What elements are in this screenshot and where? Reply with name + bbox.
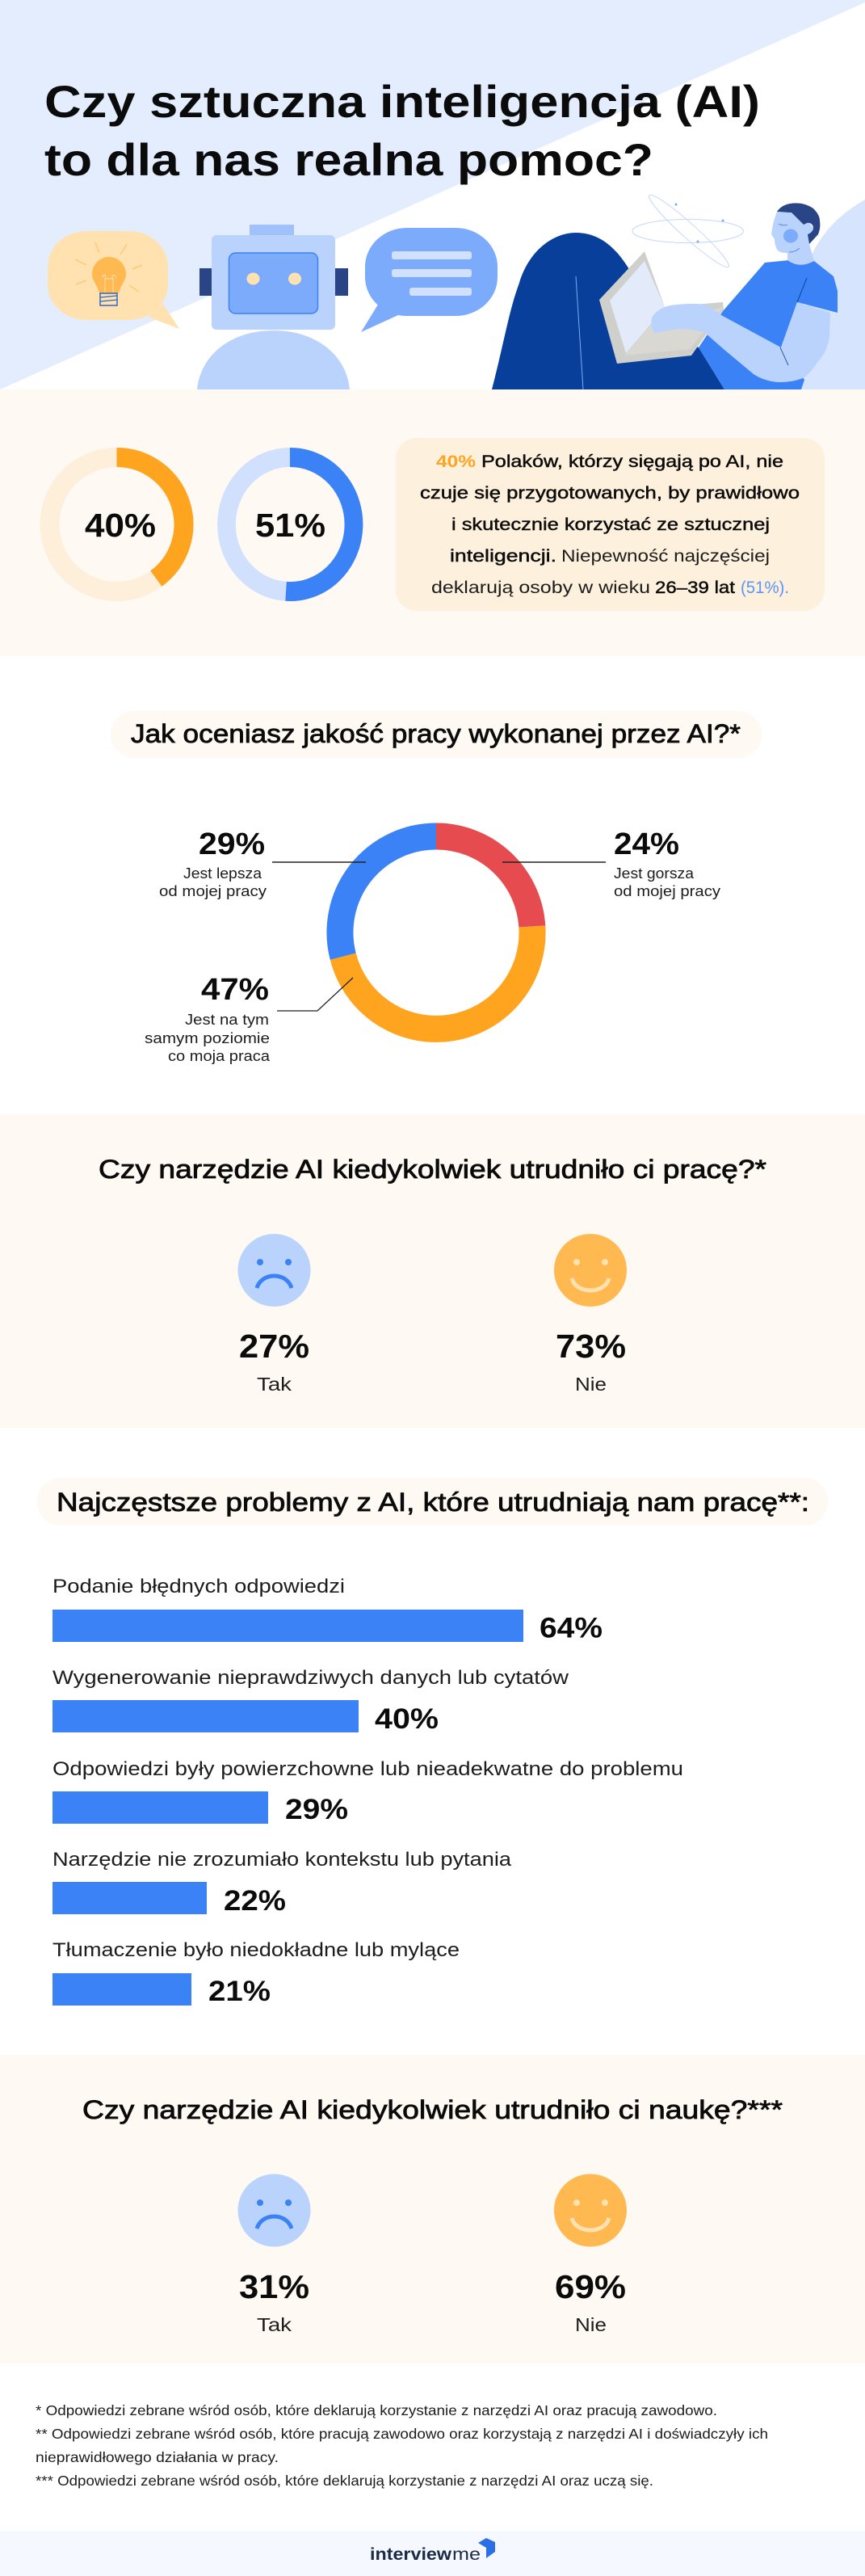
- bar: false data 40%: [52, 1667, 569, 1735]
- chart: quality donut: [340, 836, 532, 1029]
- bar: inaccurate translation 21%: 21%: [208, 1976, 271, 2007]
- bar: incorrect answers 64%: [52, 1576, 603, 1644]
- callout: preparedness text: czuje się przygotowanych, by prawidłowo: [420, 484, 800, 503]
- stat: 69% no: 69%: [555, 2268, 626, 2305]
- chart: 40% donut: [50, 457, 184, 591]
- icon: happy face: [554, 1234, 627, 1307]
- stat: 31% yes: 31%: [239, 2268, 309, 2305]
- bar: misunderstood context 22%: [52, 1849, 512, 1917]
- icon: lightbulb speech bubble: [48, 231, 179, 329]
- footer band: [0, 2531, 865, 2576]
- label: 24% worse: od mojej pracy: [614, 883, 720, 899]
- label: 47% same level: 47%: [201, 973, 269, 1007]
- panel: quality of AI work: [111, 711, 762, 1064]
- stat: 31% yes: Tak: [257, 2314, 292, 2335]
- bar: shallow answers 29%: 29%: [285, 1794, 348, 1825]
- stat: 27% yes: 27%: [239, 1328, 309, 1365]
- panel: most common problems: [37, 1478, 828, 2007]
- heading: common problems: [37, 1478, 828, 1526]
- label: 47% same level: samym poziomie: [145, 1030, 270, 1046]
- panel: preparedness statistics: [0, 389, 865, 656]
- bar: false data 40%: Wygenerowanie nieprawdziwych danych lub cytatów: [52, 1667, 569, 1689]
- chart: 51% donut: [226, 457, 354, 591]
- bar: incorrect answers 64%: 64%: [540, 1613, 603, 1644]
- label: 29% better: [159, 827, 366, 899]
- heading: hinder learning question: Czy narzędzie AI kiedykolwiek utrudniło ci naukę?***: [82, 2095, 783, 2124]
- label: 24% worse: Jest gorsza: [614, 865, 695, 882]
- footnotes: nieprawidłowego działania w pracy.: [36, 2449, 279, 2465]
- label: 29% better: od mojej pracy: [159, 883, 267, 899]
- stat: 73% no: [556, 1328, 626, 1395]
- footnotes: *** Odpowiedzi zebrane wśród osób, które deklarują korzystanie z narzędzi AI oraz uczą się.: [36, 2473, 653, 2489]
- label: 47% same level: co moja praca: [168, 1048, 271, 1064]
- callout: preparedness text: Polaków, którzy sięgają po AI, nie: [481, 452, 783, 471]
- callout: preparedness text: i skutecznie korzystać ze sztucznej: [451, 516, 770, 534]
- callout: preparedness text: Niepewność najczęściej: [561, 547, 770, 566]
- callout: preparedness text: deklarują osoby w wieku: [431, 579, 650, 597]
- chart: 40% donut: 40%: [85, 507, 156, 544]
- callout: preparedness text: [396, 438, 825, 611]
- footnotes: ** Odpowiedzi zebrane wśród osób, które pracują zawodowo oraz korzystają z narzędzi AI i doświadczyły ich: [36, 2426, 768, 2442]
- stat: 69% no: [555, 2268, 626, 2335]
- bar: inaccurate translation 21%: Tłumaczenie było niedokładne lub mylące: [52, 1939, 460, 1961]
- logo: interviewme: me: [452, 2545, 481, 2564]
- bar: misunderstood context 22%: Narzędzie nie zrozumiało kontekstu lub pytania: [52, 1849, 512, 1871]
- callout: preparedness text: 26–39 lat: [655, 579, 735, 597]
- heading: work quality question: [111, 711, 762, 758]
- icon: sad face: [237, 2174, 310, 2246]
- callout: preparedness text: 40%: [436, 452, 476, 471]
- icon: happy face: [554, 2174, 627, 2246]
- label: 24% worse: [502, 827, 720, 899]
- footnotes: * Odpowiedzi zebrane wśród osób, które deklarują korzystanie z narzędzi AI oraz pracują zawodowo.: [36, 2402, 717, 2418]
- label: 47% same level: [145, 973, 353, 1064]
- title: [44, 76, 760, 185]
- panel: did AI hinder work: [0, 1114, 865, 1428]
- heading: work quality question: Jak oceniasz jakość pracy wykonanej przez AI?*: [131, 719, 741, 748]
- stat: 69% no: Nie: [575, 2314, 607, 2335]
- title: Czy sztuczna inteligencja (AI): [44, 76, 760, 127]
- panel: hero header: [0, 0, 865, 389]
- stat: 27% yes: [239, 1328, 309, 1395]
- bar: incorrect answers 64%: Podanie błędnych odpowiedzi: [52, 1576, 345, 1597]
- label: 29% better: 29%: [199, 827, 265, 861]
- logo: interviewme: interview: [370, 2545, 452, 2564]
- icon: sad face: [237, 1234, 310, 1307]
- stat: 73% no: Nie: [575, 1374, 607, 1395]
- stat: 31% yes: [239, 2268, 309, 2335]
- icon: robot: [197, 225, 350, 389]
- label: 24% worse: 24%: [614, 827, 679, 861]
- stat: 73% no: 73%: [556, 1328, 626, 1365]
- chart: 51% donut: 51%: [255, 507, 325, 544]
- bar: inaccurate translation 21%: [52, 1939, 460, 2007]
- bar: misunderstood context 22%: 22%: [224, 1885, 286, 1917]
- panel: did AI hinder learning: [0, 2055, 865, 2363]
- icon: person with tablet: [492, 190, 838, 389]
- icon: chat speech bubble: [361, 228, 498, 332]
- label: 47% same level: Jest na tym: [185, 1012, 269, 1028]
- bar: shallow answers 29%: Odpowiedzi były powierzchowne lub nieadekwatne do problemu: [52, 1758, 683, 1780]
- callout: preparedness text: inteligencji.: [450, 547, 556, 566]
- heading: common problems: Najczęstsze problemy z AI, które utrudniają nam pracę**:: [57, 1488, 809, 1517]
- logo: interviewme: [370, 2538, 495, 2564]
- heading: hinder work question: Czy narzędzie AI kiedykolwiek utrudniło ci pracę?*: [99, 1155, 766, 1184]
- footnotes: [36, 2402, 768, 2489]
- title: to dla nas realna pomoc?: [44, 134, 653, 185]
- callout: preparedness text: (51%).: [741, 579, 789, 597]
- bar: shallow answers 29%: [52, 1758, 683, 1825]
- bar: false data 40%: 40%: [375, 1703, 439, 1735]
- stat: 27% yes: Tak: [257, 1374, 292, 1395]
- bar chart: problems: [52, 1576, 683, 2007]
- label: 29% better: Jest lepsza: [183, 865, 262, 882]
